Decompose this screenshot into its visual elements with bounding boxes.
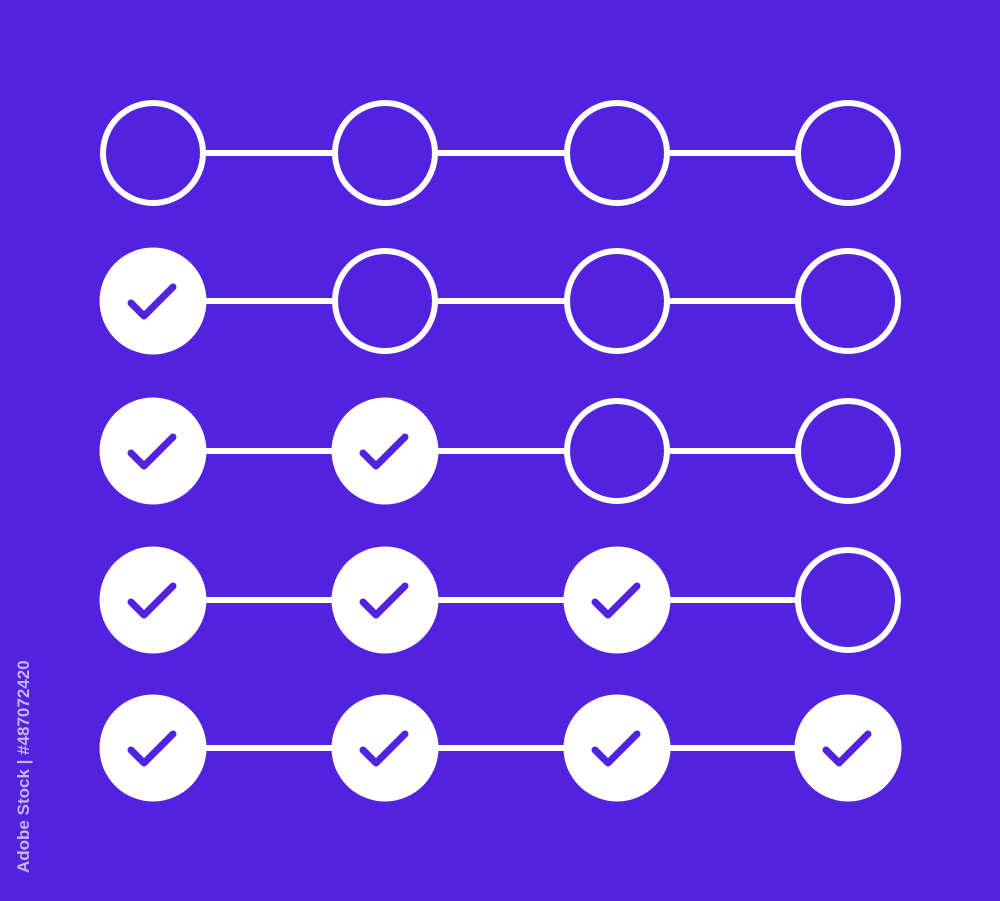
row 3: two steps completed (100, 398, 898, 504)
stock id text: Adobe Stock | #487072420 (14, 660, 33, 873)
row 5: all steps completed (100, 694, 902, 802)
row 2: one step completed (100, 248, 898, 354)
row 1: no steps completed (103, 103, 898, 203)
row 4: three steps completed (100, 546, 898, 654)
